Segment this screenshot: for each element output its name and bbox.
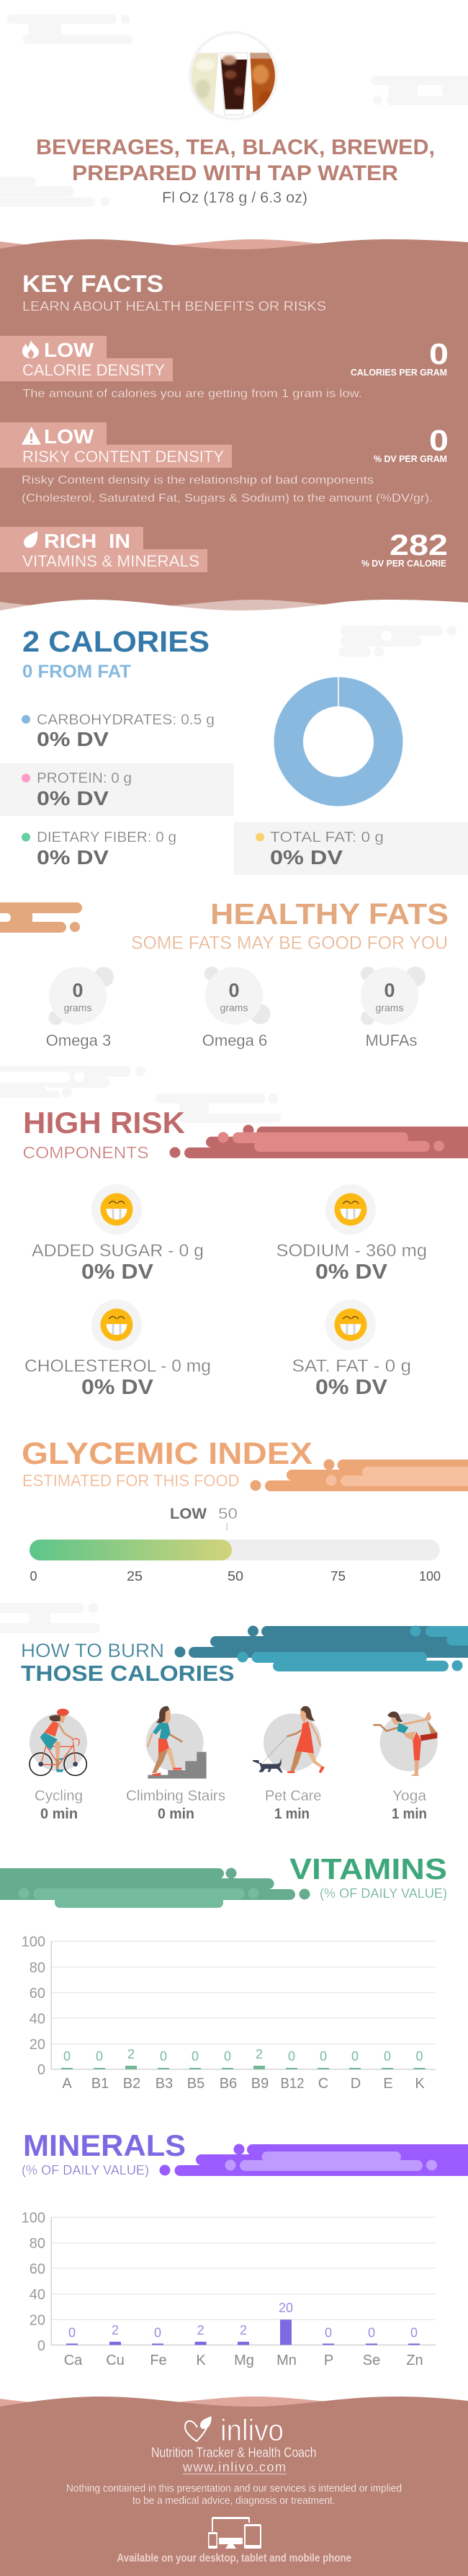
glycemic index gauge: LOW: [170, 1506, 207, 1522]
fat: omega 3: [46, 967, 114, 1049]
bar chart: minerals: 0: [37, 2338, 45, 2354]
bar chart: vitamins: A: [62, 2076, 72, 2092]
decoration: burn banner: [174, 1626, 468, 1671]
bar chart: minerals: Fe: [150, 2353, 167, 2368]
bar chart: minerals: 0: [325, 2326, 332, 2340]
fat: mufas: [361, 967, 426, 1049]
title: [36, 136, 435, 185]
glycemic index gauge: 50: [218, 1506, 238, 1522]
nutrient: dietary fiber: DIETARY FIBER: 0 g: [37, 830, 176, 845]
donut chart: [289, 676, 388, 791]
bar chart: vitamins: 0: [351, 2049, 359, 2064]
activity: pet care: 1 min: [274, 1806, 310, 1822]
risk: added sugar: 0% DV: [81, 1261, 154, 1284]
nutrient: carbohydrates: 0% DV: [37, 728, 109, 750]
bar chart: vitamins: D: [351, 2076, 361, 2092]
tagline: Nutrition Tracker & Health Coach: [151, 2446, 317, 2461]
fat: mufas: 0: [384, 980, 395, 1001]
bar chart: vitamins: 80: [30, 1960, 45, 1976]
decoration: minerals banner: [160, 2144, 468, 2176]
subheading: percent of daily value: (% OF DAILY VALUE): [22, 2163, 149, 2177]
bar chart: minerals: 60: [30, 2262, 45, 2278]
risk: cholesterol: 0% DV: [81, 1376, 154, 1399]
decoration: vitamins banner: [0, 1868, 310, 1908]
bar chart: vitamins: 100: [22, 1935, 45, 1950]
disclaimer: [66, 2483, 402, 2507]
panel: footer: [0, 2397, 468, 2576]
card: rich in vitamins and minerals: VITAMINS & MINERALS: [22, 552, 199, 570]
nutrient: total fat: 0% DV: [270, 846, 343, 869]
bar chart: vitamins: B3: [156, 2076, 173, 2092]
activity: pet care: Pet Care: [265, 1788, 321, 1804]
subheading: from fat: 0 FROM FAT: [22, 662, 131, 682]
decoration: glycemic banner: [251, 1459, 468, 1491]
icon: woman on stairs: [146, 1706, 207, 1779]
card: rich in vitamins and minerals: RICH IN: [44, 530, 130, 552]
bar chart: minerals: Mn: [276, 2353, 297, 2368]
cloud: high risk decoration left: [0, 1066, 145, 1098]
card: calorie density: The amount of calories you are getting from 1 gram is low.: [22, 388, 362, 400]
activity: yoga: [373, 1712, 438, 1822]
bar chart: vitamins: 20: [30, 2037, 45, 2053]
availability note: Available on your desktop, tablet and mobile phone: [117, 2552, 351, 2564]
fat: omega 6: Omega 6: [202, 1031, 267, 1049]
panel: key facts: [0, 239, 468, 620]
bar chart: minerals: 0: [368, 2326, 375, 2340]
heading: high risk: HIGH RISK: [23, 1106, 185, 1140]
food image: three glasses: [189, 32, 279, 119]
heading: vitamins: VITAMINS: [289, 1852, 447, 1886]
heading: calories: 2 CALORIES: [22, 625, 210, 658]
cloud: top right decoration: [371, 76, 468, 105]
bar chart: vitamins: B5: [187, 2076, 204, 2092]
icon: heart: [185, 2421, 207, 2441]
bar chart: minerals: 2: [112, 2323, 119, 2337]
risk: sodium: SODIUM - 360 mg: [276, 1241, 427, 1261]
bar chart: minerals: Se: [363, 2353, 380, 2368]
bar chart: vitamins: 60: [30, 1986, 45, 2002]
decoration: healthy fats banner: [0, 902, 82, 933]
bar chart: vitamins: C: [318, 2076, 328, 2092]
bar chart: minerals: 0: [154, 2326, 161, 2340]
title: BEVERAGES, TEA, BLACK, BREWED,: [36, 136, 435, 159]
nutrient: protein: 0% DV: [37, 787, 109, 809]
bar chart: minerals: 2: [240, 2323, 247, 2337]
card: risky content density: [0, 422, 449, 505]
glycemic index gauge: 0: [30, 1569, 37, 1584]
subheading: estimated: ESTIMATED FOR THIS FOOD: [22, 1471, 239, 1490]
risk: sodium: [276, 1184, 427, 1284]
card: risky content density: % DV PER GRAM: [374, 453, 447, 464]
icon: woman walking dog: [253, 1706, 325, 1773]
glycemic index gauge: 100: [419, 1569, 441, 1584]
subheading: LEARN ABOUT HEALTH BENEFITS OR RISKS: [22, 299, 326, 314]
card: calorie density: 0: [429, 337, 449, 370]
card: risky content density: (Cholesterol, Saturated Fat, Sugars & Sodium) to the amount (%DV/gr).: [22, 492, 433, 505]
card: calorie density: CALORIE DENSITY: [22, 361, 165, 379]
nutrient: dietary fiber: 0% DV: [37, 846, 109, 869]
fat: omega 6: 0: [228, 980, 240, 1001]
bar chart: minerals: Ca: [64, 2353, 83, 2368]
bar chart: vitamins: E: [383, 2076, 393, 2092]
subheading: percent of daily value: (% OF DAILY VALUE): [320, 1886, 447, 1901]
risk: cholesterol: CHOLESTEROL - 0 mg: [24, 1356, 211, 1376]
website link: www.inlivo.com: [182, 2460, 286, 2474]
nutrient: protein: [0, 763, 234, 816]
bar chart: vitamins: 0: [37, 2062, 45, 2078]
risk: added sugar: ADDED SUGAR - 0 g: [32, 1241, 204, 1261]
bar chart: minerals: 40: [30, 2287, 45, 2303]
card: risky content density: LOW: [44, 425, 94, 448]
glycemic index gauge: [30, 1506, 441, 1584]
activity: yoga: Yoga: [392, 1788, 427, 1804]
fat: omega 3: 0: [72, 980, 84, 1001]
heading: those calories: THOSE CALORIES: [21, 1661, 235, 1686]
bar chart: vitamins: B12: [281, 2076, 304, 2092]
activity: cycling: [30, 1709, 87, 1822]
bar chart: vitamins: 0: [384, 2049, 391, 2064]
card: rich in vitamins and minerals: [0, 527, 448, 572]
icon: yoga pose: [373, 1712, 438, 1776]
nutrient: dietary fiber: [22, 830, 176, 869]
fat: omega 6: [202, 967, 271, 1049]
icon: flame: [22, 340, 39, 358]
card: calorie density: CALORIES PER GRAM: [351, 367, 447, 378]
bar chart: vitamins: B2: [123, 2076, 140, 2092]
bar chart: vitamins: 0: [63, 2049, 71, 2064]
fat: omega 6: grams: [220, 1002, 248, 1013]
nutrient: total fat: [234, 822, 468, 875]
bar chart: minerals: 0: [410, 2326, 418, 2340]
glycemic index gauge: 25: [127, 1569, 143, 1584]
risk: added sugar: [32, 1184, 204, 1284]
bar chart: minerals: 20: [279, 2301, 293, 2315]
risk: saturated fat: SAT. FAT - 0 g: [292, 1356, 411, 1376]
bar chart: minerals: Mg: [234, 2353, 254, 2368]
bar chart: minerals: 0: [68, 2326, 76, 2340]
bar chart: vitamins: 2: [256, 2047, 263, 2061]
bar chart: minerals: K: [196, 2353, 206, 2368]
activity: cycling: Cycling: [35, 1788, 83, 1804]
bar chart: minerals: 100: [22, 2210, 45, 2226]
heading: how to burn: HOW TO BURN: [21, 1640, 164, 1661]
bar chart: vitamins: B9: [251, 2076, 269, 2092]
bar chart: minerals: [22, 2210, 436, 2368]
bar chart: vitamins: 0: [224, 2049, 231, 2064]
cloud: burn decoration: [0, 1603, 100, 1633]
card: risky content density: RISKY CONTENT DENSITY: [22, 448, 224, 466]
fat: omega 3: grams: [64, 1002, 91, 1013]
heading: glycemic index: GLYCEMIC INDEX: [22, 1436, 312, 1471]
logo: inlivo: [185, 2413, 284, 2447]
bar chart: minerals: P: [324, 2353, 333, 2368]
glycemic index gauge: 75: [330, 1569, 346, 1584]
icon: warning triangle: [22, 427, 41, 445]
nutrient: total fat: TOTAL FAT: 0 g: [270, 830, 384, 845]
icon: devices: [208, 2517, 261, 2549]
activity: pet care: [253, 1706, 325, 1822]
icon: leaf: [24, 531, 37, 548]
bar chart: vitamins: 0: [160, 2049, 167, 2064]
heading: healthy fats: HEALTHY FATS: [210, 897, 449, 931]
risk: saturated fat: [292, 1300, 411, 1399]
bar chart: vitamins: 2: [127, 2047, 135, 2061]
fat: mufas: MUFAs: [365, 1031, 418, 1049]
cloud: high risk decoration right: [156, 1093, 281, 1123]
heading: minerals: MINERALS: [23, 2128, 186, 2162]
card: risky content density: 0: [429, 424, 449, 457]
activity: yoga: 1 min: [392, 1806, 427, 1822]
card: rich in vitamins and minerals: % DV PER CALORIE: [361, 558, 446, 569]
card: calorie density: [0, 336, 449, 400]
cloud: top left decoration: [7, 14, 132, 44]
cloud: mid left decoration: [0, 177, 109, 207]
nutrient: carbohydrates: CARBOHYDRATES: 0.5 g: [37, 712, 215, 728]
wordmark: inlivo: [220, 2413, 284, 2447]
bar chart: vitamins: 0: [96, 2049, 103, 2064]
disclaimer: to be a medical advice, diagnosis or treatment.: [132, 2495, 336, 2507]
bar chart: minerals: Zn: [406, 2353, 423, 2368]
bar chart: minerals: 80: [30, 2236, 45, 2252]
activity: cycling: 0 min: [40, 1806, 78, 1822]
subheading: components: COMPONENTS: [23, 1143, 148, 1162]
bar chart: minerals: 20: [30, 2312, 45, 2328]
risk: cholesterol: [24, 1300, 211, 1399]
bar chart: vitamins: 0: [320, 2049, 327, 2064]
bar chart: vitamins: B1: [91, 2076, 109, 2092]
disclaimer: Nothing contained in this presentation and our services is intended or implied: [66, 2483, 402, 2495]
bar chart: minerals: 2: [197, 2323, 204, 2337]
activity: climbing stairs: Climbing Stairs: [126, 1788, 225, 1804]
nutrient: protein: PROTEIN: 0 g: [37, 770, 132, 786]
title: PREPARED WITH TAP WATER: [72, 161, 398, 185]
card: risky content density: Risky Content density is the relationship of bad components: [22, 474, 374, 487]
serving size: Fl Oz (178 g / 6.3 oz): [162, 190, 307, 206]
bar chart: vitamins: 40: [30, 2011, 45, 2027]
activity: climbing stairs: 0 min: [158, 1806, 194, 1822]
subheading: healthy fats: SOME FATS MAY BE GOOD FOR YOU: [131, 933, 448, 953]
decoration: high risk banner: [170, 1124, 468, 1158]
fat: mufas: grams: [376, 1002, 403, 1013]
risk: saturated fat: 0% DV: [315, 1376, 388, 1399]
glycemic index gauge: 50: [228, 1569, 243, 1584]
heading: key facts: KEY FACTS: [22, 270, 163, 297]
icon: cyclist: [30, 1709, 87, 1775]
activity: climbing stairs: [126, 1706, 225, 1822]
nutrient: carbohydrates: [22, 712, 215, 750]
fat: omega 3: Omega 3: [46, 1031, 111, 1049]
card: rich in vitamins and minerals: 282: [390, 528, 448, 561]
bar chart: vitamins: [22, 1935, 436, 2092]
bar chart: vitamins: 0: [415, 2049, 423, 2064]
bar chart: vitamins: 0: [288, 2049, 295, 2064]
risk: sodium: 0% DV: [315, 1261, 388, 1284]
bar chart: vitamins: B6: [220, 2076, 237, 2092]
cloud: calories decoration: [338, 626, 456, 657]
icon: logo leaf: [200, 2416, 212, 2429]
card: calorie density: LOW: [44, 339, 94, 361]
bar chart: vitamins: 0: [192, 2049, 199, 2064]
bar chart: vitamins: K: [415, 2076, 425, 2092]
bar chart: minerals: Cu: [106, 2353, 125, 2368]
